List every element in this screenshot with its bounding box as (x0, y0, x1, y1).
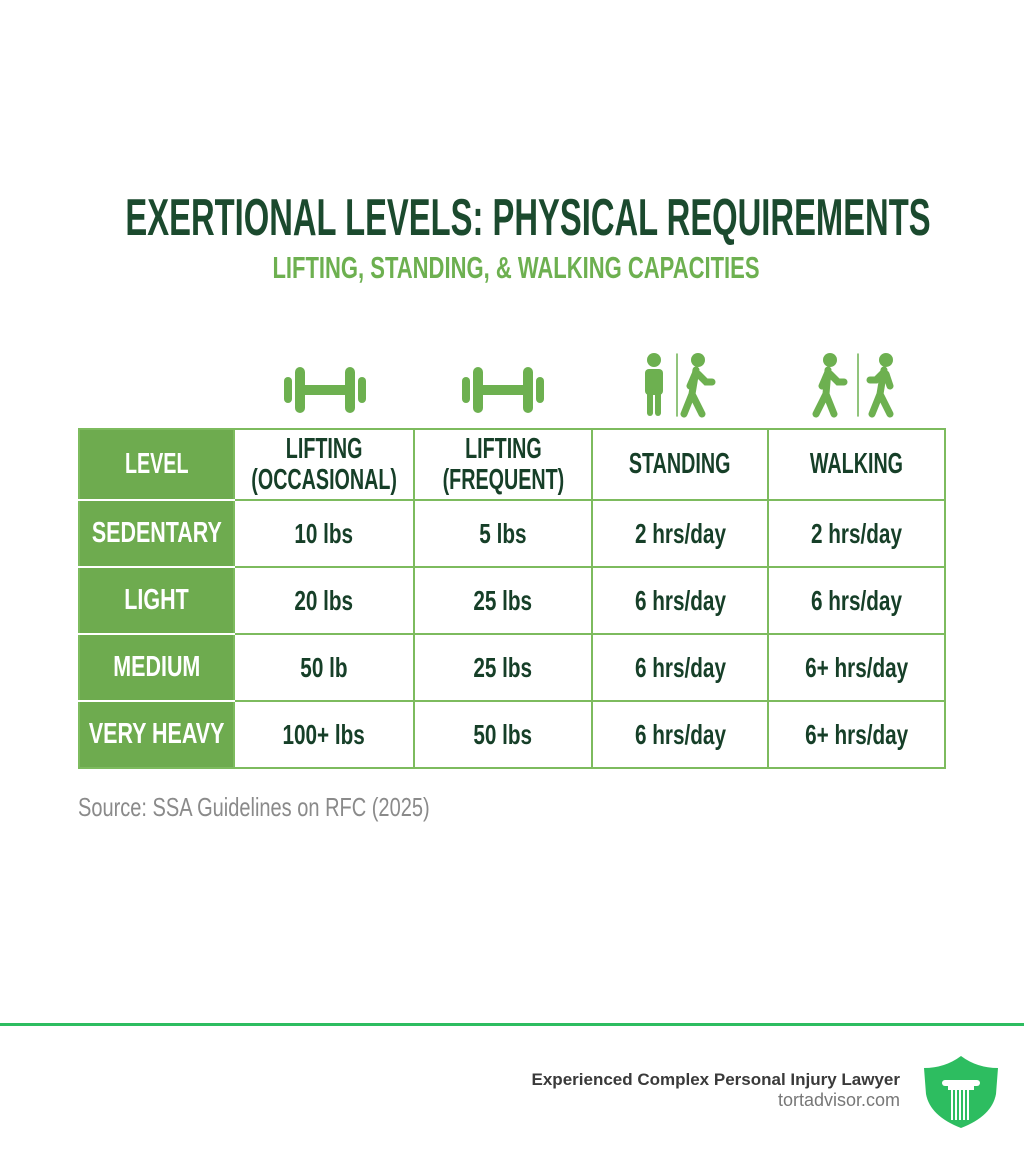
table: 5 lbs (479, 518, 527, 548)
table: 50 lb (300, 652, 348, 682)
table: SEDENTARY (92, 517, 221, 549)
table: 10 lbs (295, 518, 353, 548)
table: 6 hrs/day (634, 718, 725, 750)
table: VERY HEAVY (89, 718, 224, 750)
table: 20 lbs (295, 584, 353, 616)
table: 25 lbs (474, 584, 532, 616)
table: WALKING (810, 448, 903, 480)
table: LIGHT (124, 584, 189, 616)
table: 50 lbs (474, 718, 532, 750)
footer text (532, 1070, 900, 1110)
table: 6+ hrs/day (805, 718, 908, 750)
icon: standing / walking (645, 353, 716, 418)
table: 2 hrs/day (811, 518, 902, 548)
table: 2 hrs/day (634, 518, 725, 548)
footer text: Experienced Complex Personal Injury Lawyer (532, 1070, 900, 1089)
footer line (0, 1023, 1024, 1026)
table: (OCCASIONAL) (251, 464, 397, 496)
table: LIFTING (465, 432, 541, 464)
footer text: tortadvisor.com (778, 1090, 900, 1110)
table: 6 hrs/day (634, 652, 725, 682)
icon: walking / walking (812, 353, 894, 418)
source note: Source: SSA Guidelines on RFC (2025) (78, 792, 430, 822)
table: LEVEL (125, 448, 188, 480)
table: LIFTING (286, 432, 362, 464)
title: EXERTIONAL LEVELS: PHYSICAL REQUIREMENTS (125, 189, 931, 247)
table: 100+ lbs (283, 718, 365, 750)
table (78, 428, 946, 769)
logo shield (924, 1056, 998, 1128)
subtitle: LIFTING, STANDING, & WALKING CAPACITIES (272, 250, 760, 285)
icon: dumbbell occasional (284, 367, 366, 413)
table: 6+ hrs/day (805, 652, 908, 682)
table: (FREQUENT) (442, 464, 564, 496)
table: 25 lbs (474, 652, 532, 682)
icon: dumbbell frequent (462, 367, 544, 413)
table: 6 hrs/day (634, 584, 725, 616)
icons row (284, 353, 894, 418)
table: MEDIUM (113, 651, 200, 683)
table: STANDING (629, 448, 731, 480)
table: 6 hrs/day (811, 584, 902, 616)
